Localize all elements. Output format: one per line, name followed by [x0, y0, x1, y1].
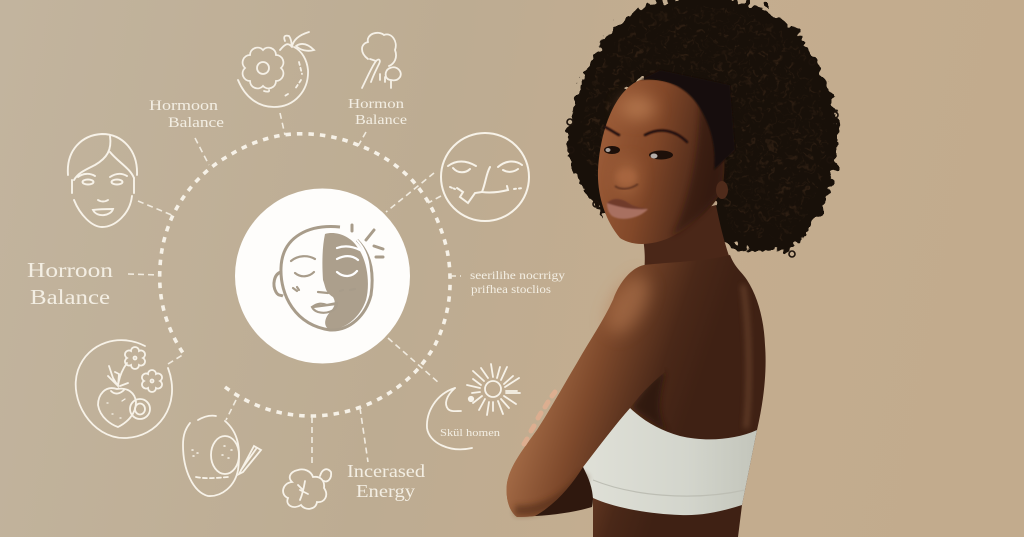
icon: hibiscus [283, 469, 331, 509]
label: hormon balance: Hormon [348, 97, 404, 112]
label: horroon balance [27, 258, 114, 309]
ear [716, 181, 728, 199]
arm over top [507, 300, 665, 517]
loose curls [567, 59, 838, 257]
rays [352, 225, 383, 257]
label: hormoon balance [149, 98, 224, 131]
lips [607, 199, 648, 219]
label: increased energy: Incerased [347, 461, 425, 481]
face [598, 80, 724, 244]
armpit shadow [632, 372, 668, 432]
left eye [604, 146, 620, 154]
icon: moon and sun [427, 364, 520, 449]
label: side note [470, 270, 565, 296]
spine highlight [743, 285, 749, 428]
central white circle with face icon [235, 188, 410, 364]
icon: moon face [441, 133, 529, 221]
icon: flower and fruit [238, 32, 314, 107]
label: increased energy: Energy [356, 481, 415, 501]
label: side note: seerilihe nocrrigy [470, 270, 565, 282]
label: increased energy [347, 461, 425, 501]
lower hand shadow [535, 467, 593, 516]
label: hormon balance: Balance [355, 113, 407, 128]
woman portrait [507, 0, 838, 537]
eyes, brows and mouth [291, 246, 360, 313]
label: hormoon balance: Balance [168, 115, 224, 131]
dotted ring [160, 134, 450, 416]
top hem line [593, 480, 745, 496]
icon: moon and sun: Skül homen [440, 428, 500, 439]
forehead highlight [620, 96, 656, 120]
face shadow [672, 100, 723, 236]
hair over forehead [640, 70, 735, 170]
icon: avocado [183, 416, 261, 496]
face outline [281, 227, 372, 330]
right eye [649, 150, 673, 160]
eyebrows [605, 127, 687, 142]
torso and arm [507, 255, 766, 537]
cheek highlight [618, 160, 638, 196]
label: horroon balance: Balance [30, 285, 110, 309]
nose [616, 169, 636, 185]
label: side note: prifhea stoclios [471, 284, 552, 296]
hair back [567, 0, 838, 257]
icon: tree [362, 33, 401, 88]
ear [274, 272, 283, 296]
label: hormoon balance: Hormoon [149, 98, 219, 114]
elbow shadow [515, 475, 585, 510]
icon: strawberry circle [76, 340, 172, 438]
fingers [524, 392, 555, 444]
shoulder highlight [598, 269, 658, 341]
white bandeau top [583, 408, 757, 515]
label: hormon balance [348, 97, 407, 128]
shaded half of face [322, 233, 368, 330]
label: horroon balance: Horroon [27, 258, 114, 282]
icon: woman face [68, 134, 137, 227]
neck [640, 205, 735, 272]
connector lines [128, 113, 461, 466]
